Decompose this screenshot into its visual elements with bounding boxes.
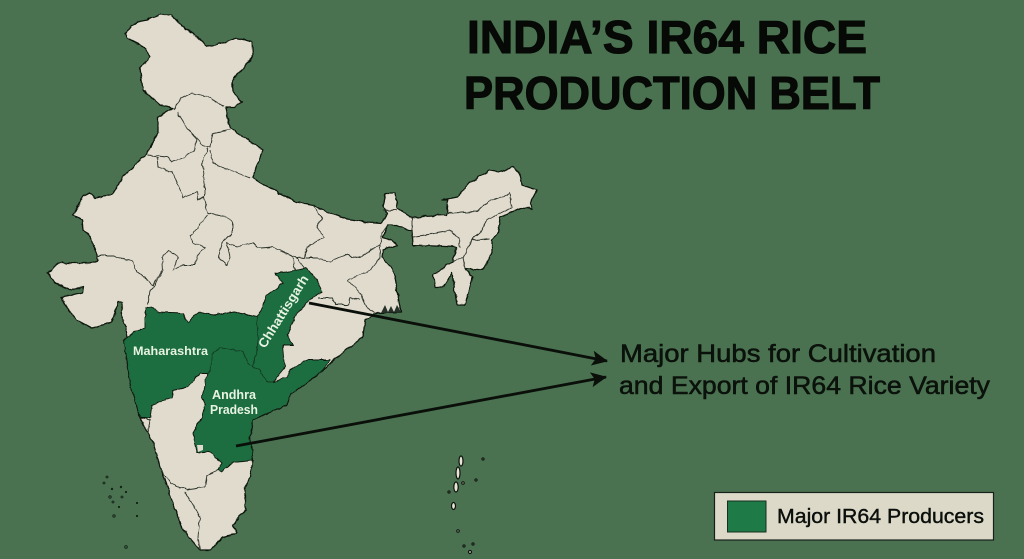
title: INDIA’S IR64 RICE <box>467 11 867 63</box>
mainland land mass <box>48 15 537 550</box>
label: Andhra Pradesh: Andhra <box>212 387 257 402</box>
major producers region: Maharashtra, Chhattisgarh, Andhra Pradesh <box>124 268 330 472</box>
legend swatch <box>728 501 766 532</box>
state borders <box>97 93 512 550</box>
Sundarbans delta <box>381 305 401 313</box>
label: Andhra Pradesh: Pradesh <box>210 402 258 417</box>
caption: and Export of IR64 Rice Variety <box>619 372 991 400</box>
Andaman and Nicobar islands <box>448 456 484 554</box>
Lakshadweep islands <box>103 476 138 548</box>
caption <box>619 340 991 400</box>
title: PRODUCTION BELT <box>464 67 880 119</box>
arrow: Andhra Pradesh to caption <box>236 377 606 446</box>
legend label: Major IR64 Producers <box>777 506 984 528</box>
label: Chhattisgarh: Chhattisgarh <box>255 272 312 351</box>
title <box>464 11 880 119</box>
caption: Major Hubs for Cultivation <box>620 340 936 368</box>
label: Maharashtra: Maharashtra <box>133 344 208 358</box>
legend <box>714 492 994 540</box>
label: Andhra Pradesh <box>210 387 258 417</box>
arrow: Chhattisgarh to caption <box>309 303 607 361</box>
map of India <box>48 15 537 554</box>
